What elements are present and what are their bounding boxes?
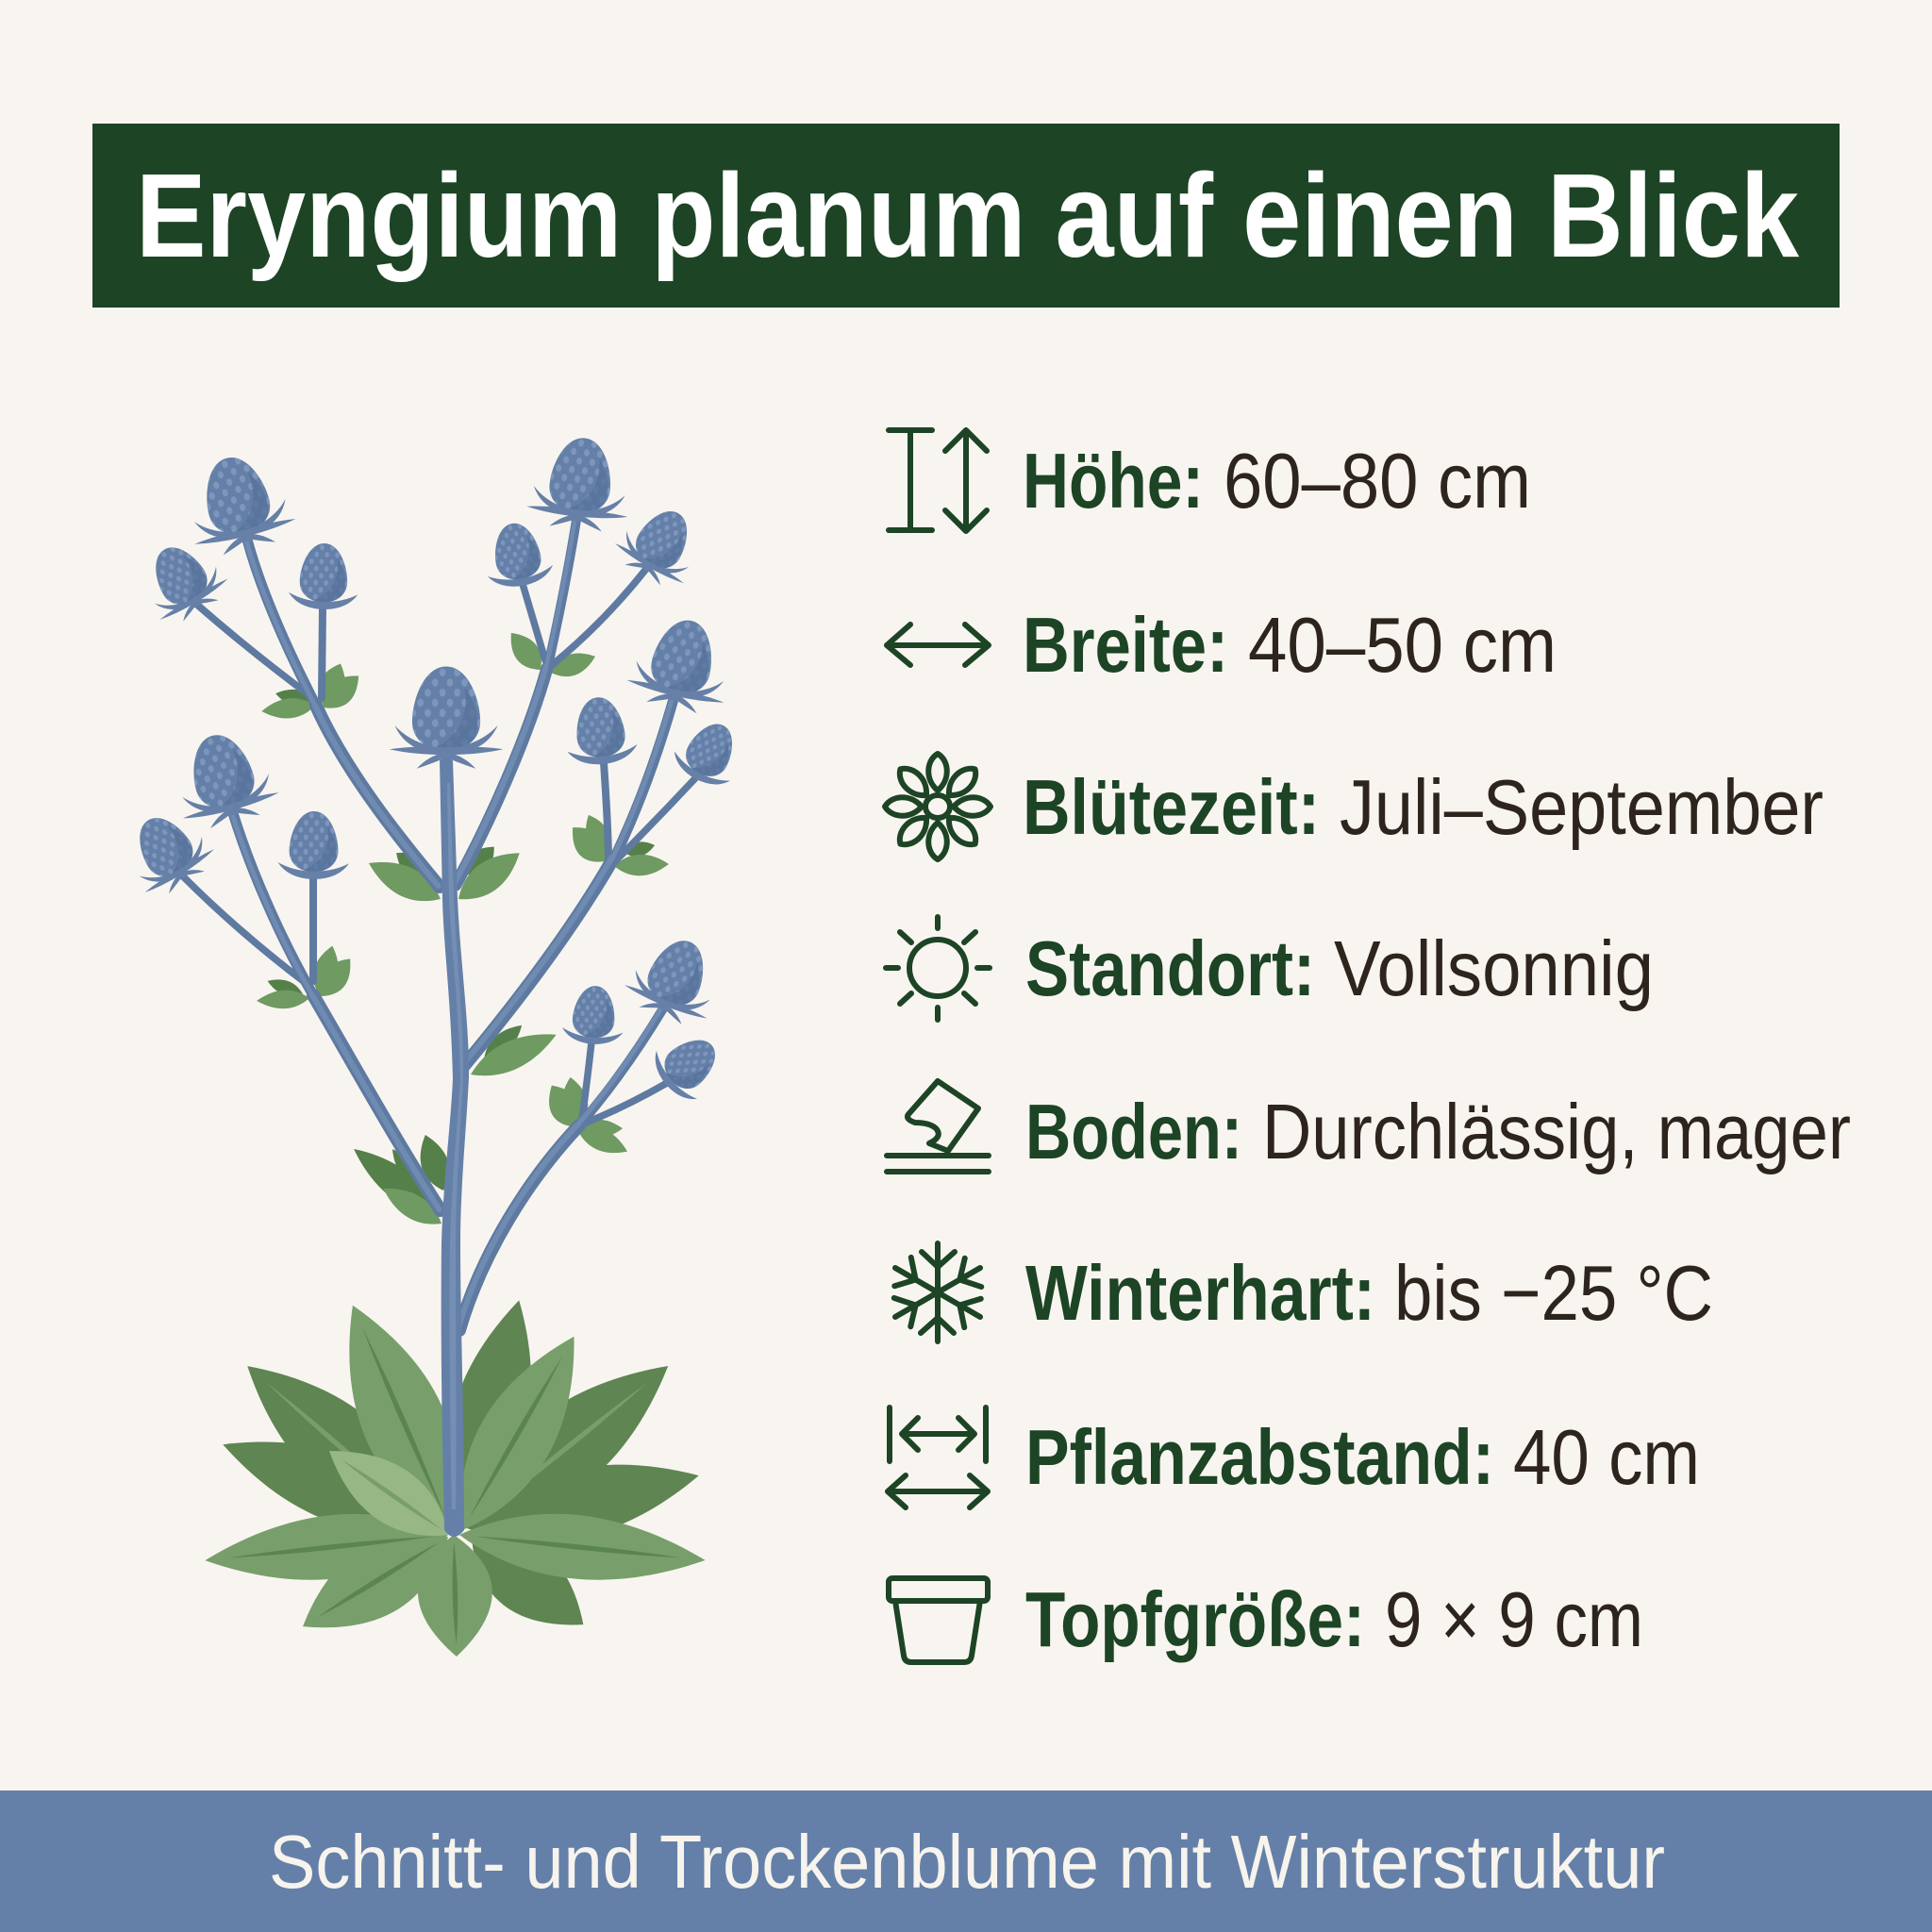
row: Pflanzabstand xyxy=(888,1407,1700,1507)
row: Breite: Breite: xyxy=(1023,601,1228,689)
row: Blütezeit: Blütezeit: xyxy=(1023,763,1320,851)
row: Höhe: 60–80 cm xyxy=(1224,437,1531,525)
icon: sun xyxy=(886,917,990,1020)
icon: pot xyxy=(889,1578,988,1662)
row: Boden: Durchlässig, mager xyxy=(1262,1088,1851,1175)
row: Topfgröße: 9 × 9 cm xyxy=(1385,1575,1643,1663)
icon: width xyxy=(887,625,989,665)
row: Blütezeit xyxy=(885,754,1824,859)
row: Breite xyxy=(887,601,1557,689)
stem leaves xyxy=(257,625,669,1234)
row: Höhe xyxy=(889,430,1531,531)
icon: snowflake xyxy=(887,1243,989,1341)
facts list xyxy=(885,430,1851,1663)
footer banner: Schnitt- und Trockenblume mit Winterstruktur xyxy=(269,1820,1665,1904)
title banner xyxy=(92,124,1840,308)
row: Standort: Standort: xyxy=(1025,924,1315,1012)
rosette of basal leaves xyxy=(202,1289,708,1657)
icon: soil xyxy=(887,1081,989,1172)
icon: flower xyxy=(885,754,991,859)
flower heads xyxy=(113,433,752,1108)
row: Blütezeit: Juli–September xyxy=(1340,763,1824,851)
row: Pflanzabstand: Pflanzabstand: xyxy=(1025,1413,1494,1501)
row: Standort: Vollsonnig xyxy=(1334,924,1654,1012)
row: Topfgröße: Topfgröße: xyxy=(1025,1575,1365,1663)
row: Höhe: Höhe: xyxy=(1023,437,1204,525)
row: Boden: Boden: xyxy=(1025,1088,1242,1175)
icon: height xyxy=(889,430,987,531)
row: Breite: 40–50 cm xyxy=(1248,601,1557,689)
row: Winterhart xyxy=(887,1243,1713,1341)
icon: plant spacing xyxy=(888,1407,988,1507)
row: Winterhart: Winterhart: xyxy=(1025,1249,1375,1337)
illustration: Eryngium plant xyxy=(113,433,752,1657)
row: Boden xyxy=(887,1081,1851,1175)
row: Standort xyxy=(886,917,1654,1020)
footer banner xyxy=(0,1790,1932,1932)
row: Topfgröße xyxy=(889,1575,1643,1663)
row: Pflanzabstand: 40 cm xyxy=(1513,1413,1700,1501)
row: Winterhart: bis −25 °C xyxy=(1394,1249,1713,1337)
light front leaf xyxy=(313,1428,465,1558)
stems and branches xyxy=(183,519,696,1537)
